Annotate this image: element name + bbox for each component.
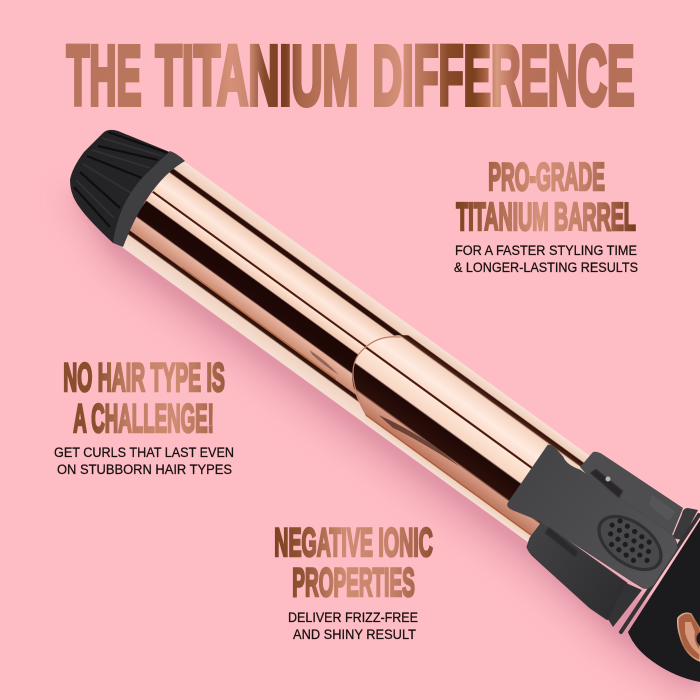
callout body text [454, 243, 638, 275]
callout: no hair type is a challenge [54, 356, 234, 477]
callout heading [63, 356, 225, 441]
rose gold logo [678, 613, 700, 661]
lower slot [545, 527, 578, 557]
callout body text: FOR A FASTER STYLING TIME [455, 243, 637, 258]
callout heading: PROPERTIES [292, 561, 415, 605]
barrel sleeve [328, 311, 596, 546]
tip collar [113, 151, 185, 247]
callout body text: & LONGER-LASTING RESULTS [454, 260, 638, 275]
callout body text [54, 445, 234, 477]
upper slot [590, 469, 623, 498]
callout body text: ON STUBBORN HAIR TYPES [57, 462, 232, 477]
callout body text: DELIVER FRIZZ-FREE [288, 610, 418, 625]
base recess detail [649, 495, 676, 521]
text: NEGATIVE IONIC [274, 521, 433, 565]
handle body [628, 520, 700, 682]
drop shadow of styling wand [58, 190, 700, 700]
curling wand product [70, 130, 700, 682]
callout: negative ionic properties [274, 521, 433, 642]
title [66, 28, 634, 122]
title: TITANIUM [156, 28, 358, 122]
handle ring [608, 508, 699, 632]
callout heading [274, 521, 433, 605]
callout: pro-grade titanium barrel [454, 156, 638, 275]
upper base piece [580, 452, 683, 535]
callout: no hair type is a challenge: NO HAIR TYPE IS [63, 356, 225, 400]
callout heading [456, 156, 636, 239]
rose gold titanium barrel [116, 157, 596, 546]
clamp thumb button [587, 503, 673, 583]
clamp lever [508, 445, 677, 588]
callout body text [288, 610, 418, 642]
lower base piece [527, 522, 627, 620]
callout body text: AND SHINY RESULT [293, 627, 416, 642]
button grip dots [599, 515, 660, 570]
black ribbed tip cap [70, 130, 185, 247]
callout heading: A CHALLENGE! [73, 397, 214, 441]
callout body text: GET CURLS THAT LAST EVEN [54, 445, 234, 460]
title: THE [66, 28, 142, 122]
